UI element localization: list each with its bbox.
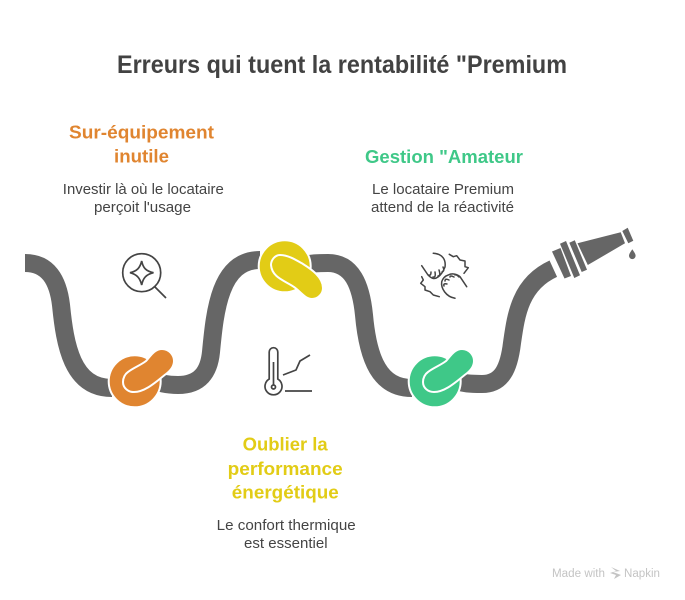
text: sur-équipement — [63, 181, 224, 216]
knot: yellow — [259, 240, 323, 299]
heading: oublier la performance: performance — [228, 459, 343, 479]
heading: sur-équipement — [69, 122, 214, 167]
text: gestion amateur: attend de la réactivité — [371, 199, 514, 216]
heading: sur-équipement: inutile — [114, 147, 169, 167]
text: gestion amateur — [371, 181, 514, 216]
text: sur-équipement: perçoit l'usage — [94, 199, 191, 216]
heading: gestion amateur: Gestion "Amateur — [365, 147, 523, 167]
heading: oublier la performance — [228, 434, 343, 502]
knot: green — [409, 349, 474, 407]
text: oublier la performance: est essentiel — [244, 535, 328, 552]
text: oublier la performance — [217, 517, 356, 552]
title: Erreurs qui tuent la rentabilité "Premium — [117, 51, 567, 79]
text: sur-équipement: Investir là où le locataire — [63, 181, 224, 198]
hose nozzle — [552, 228, 636, 278]
text: oublier la performance: Le confort thermique — [217, 517, 356, 534]
icon: magnifier with star — [123, 254, 166, 298]
watermark: Made with — [552, 568, 605, 580]
watermark: Napkin — [624, 568, 660, 580]
heading: oublier la performance: Oublier la — [243, 434, 329, 454]
knot: orange — [109, 349, 174, 407]
icon: thermometer — [265, 348, 312, 395]
text: gestion amateur: Le locataire Premium — [372, 181, 514, 198]
hose — [25, 260, 553, 388]
icon: hands — [421, 253, 468, 298]
heading: oublier la performance: énergétique — [232, 482, 339, 502]
watermark — [552, 567, 660, 580]
heading: sur-équipement: Sur-équipement — [69, 122, 214, 142]
